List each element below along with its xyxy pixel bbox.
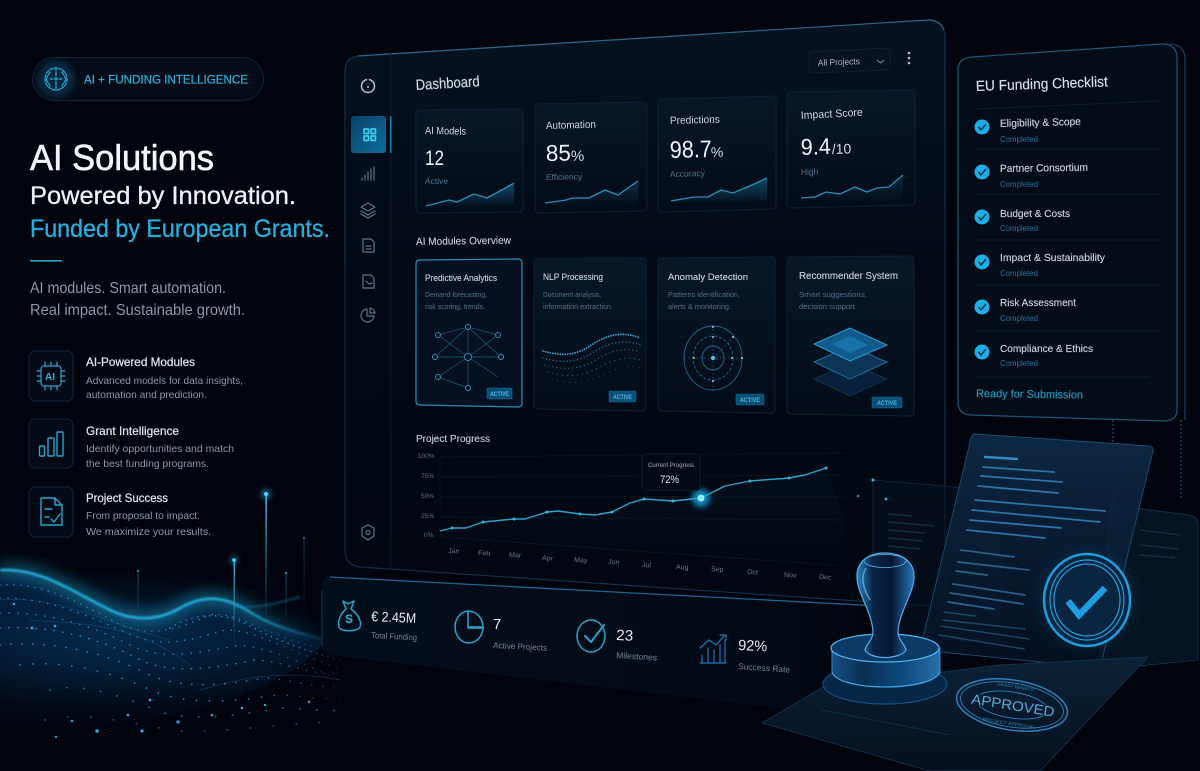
highlighted point xyxy=(692,489,710,507)
heading: Powered by Innovation. xyxy=(30,182,296,210)
y axis labels xyxy=(418,453,435,539)
module: Recommender System: decision support. xyxy=(799,302,857,311)
approved seal imprint xyxy=(953,672,1071,738)
x axis labels: Dec xyxy=(819,574,832,582)
module: Recommender System: Recommender System xyxy=(799,271,898,282)
card: Impact Score: Impact Score xyxy=(801,107,863,122)
module: Predictive Analytics: risk scoring, trends. xyxy=(425,302,485,311)
item: eligibility: Completed xyxy=(1000,135,1038,144)
stat: milestones: Milestones xyxy=(616,650,657,662)
heading: Funded by European Grants. xyxy=(30,215,330,243)
module: NLP Processing: information extraction. xyxy=(543,302,613,311)
feature: Grant Intelligence xyxy=(29,419,234,470)
heading: AI Modules Overview: AI Modules Overview xyxy=(416,235,511,248)
module: NLP Processing xyxy=(534,258,646,411)
x axis labels: Jul xyxy=(642,562,652,569)
icon: dashboard active xyxy=(351,116,392,153)
item: compliance: Completed xyxy=(1000,359,1038,368)
feature: AI-Powered Modules xyxy=(29,351,243,401)
callout: current progress: 72% xyxy=(660,474,679,486)
module: Predictive Analytics: Predictive Analytics xyxy=(425,273,497,284)
heading: Project Progress: Project Progress xyxy=(416,433,490,445)
stat: milestones xyxy=(577,620,657,662)
icon: AI chip xyxy=(37,362,65,390)
icon: growth chart xyxy=(700,635,726,663)
item: impact xyxy=(974,252,1106,278)
badge: AI + Funding Intelligence: AI + FUNDING INTELLIGENCE xyxy=(84,72,248,86)
item: risk: Risk Assessment xyxy=(1000,297,1076,309)
x axis labels: Oct xyxy=(747,569,758,577)
x axis labels xyxy=(448,548,832,582)
item: consortium: Partner Consortium xyxy=(1000,162,1088,175)
panel: funding statistics xyxy=(322,577,880,720)
y axis labels: 50% xyxy=(421,493,434,500)
card: Automation: 85 xyxy=(546,140,571,166)
subtitle: Real impact. Sustainable growth. xyxy=(30,302,245,319)
item: consortium xyxy=(974,162,1088,189)
item: risk: Completed xyxy=(1000,314,1038,323)
vertical light beams xyxy=(137,489,305,645)
project filter xyxy=(809,48,890,73)
card: Predictions: Accuracy xyxy=(670,168,706,179)
radar xyxy=(684,325,743,391)
card: Automation xyxy=(535,102,647,213)
panel: EU funding checklist xyxy=(958,44,1185,421)
module: Anomaly Detection: alerts & monitoring. xyxy=(668,302,731,311)
x axis labels: Mar xyxy=(509,552,522,560)
card: AI Models: Active xyxy=(425,176,448,186)
x axis labels: Aug xyxy=(676,564,689,572)
feature: AI-Powered Modules: automation and prediction. xyxy=(86,389,207,401)
item: consortium: Completed xyxy=(1000,180,1038,189)
icon: bars xyxy=(362,167,374,180)
module: Predictive Analytics xyxy=(416,259,522,407)
card: AI Models: AI Models xyxy=(425,125,466,138)
icon: circuit brain xyxy=(45,68,67,90)
feature: Project Success: Project Success xyxy=(86,491,168,505)
approved seal imprint: APPROVED xyxy=(970,691,1056,720)
card: Predictions xyxy=(658,96,776,212)
x axis labels: Nov xyxy=(784,572,797,580)
x axis labels: Jun xyxy=(608,559,620,567)
panel: EU funding checklist: EU Funding Checklist xyxy=(976,74,1108,95)
feature: Grant Intelligence: Grant Intelligence xyxy=(86,424,179,438)
subtitle: AI modules. Smart automation. xyxy=(30,280,226,297)
card: Impact Score: High xyxy=(801,166,819,177)
panel: dashboard xyxy=(345,20,945,606)
feature: Project Success: From proposal to impact. xyxy=(86,510,200,522)
stat: active projects: Active Projects xyxy=(493,640,547,653)
dotted wave xyxy=(543,334,640,383)
item: impact: Impact & Sustainability xyxy=(1000,252,1106,264)
icon: check circle xyxy=(577,620,605,652)
stat: total funding: Total Funding xyxy=(371,630,418,642)
card: Predictions: % xyxy=(711,144,724,160)
module: Predictive Analytics: Demand forecasting, xyxy=(425,290,487,299)
stat: active projects xyxy=(455,611,547,653)
card: Automation: % xyxy=(571,148,584,165)
approval sheet xyxy=(762,657,1148,771)
dashboard title: Dashboard xyxy=(415,73,480,94)
stat: total funding: € 2.45M xyxy=(371,608,417,626)
callout: current progress: Current Progress xyxy=(648,462,695,469)
stat: milestones: 23 xyxy=(616,627,634,645)
module: Recommender System: ACTIVE xyxy=(877,400,898,407)
stat: active projects: 7 xyxy=(493,616,501,633)
heading: AI Solutions xyxy=(30,137,214,178)
module: Recommender System xyxy=(787,256,914,416)
line chart: project progress xyxy=(418,453,845,582)
stamp xyxy=(823,553,947,704)
document with lines xyxy=(920,434,1153,668)
item: risk xyxy=(974,297,1076,323)
icon: layers xyxy=(361,203,375,218)
y axis labels: 75% xyxy=(421,473,434,480)
icon: money bag xyxy=(338,601,361,631)
feature: AI-Powered Modules: AI-Powered Modules xyxy=(86,355,195,369)
approved seal imprint: PROJECT APPROVAL xyxy=(982,717,1037,730)
item: compliance: Compliance & Ethics xyxy=(1000,343,1093,355)
back document panels xyxy=(857,420,1198,670)
item: budget: Budget & Costs xyxy=(1000,208,1070,220)
item: budget xyxy=(974,208,1070,233)
y axis labels: 0% xyxy=(424,532,434,539)
item: impact: Completed xyxy=(1000,269,1038,278)
stat: total funding xyxy=(338,601,418,642)
stat: success rate xyxy=(700,635,791,675)
callout: current progress xyxy=(642,454,700,490)
heading xyxy=(30,137,330,243)
x axis labels: Feb xyxy=(478,550,490,558)
card: AI Models xyxy=(416,109,523,213)
approved seal imprint: GRANT BENEFIT xyxy=(997,681,1035,692)
stat: total funding: S xyxy=(345,612,353,626)
module: NLP Processing: ACTIVE xyxy=(613,394,633,401)
item: budget: Completed xyxy=(1000,224,1038,233)
item: eligibility: Eligibility & Scope xyxy=(1000,116,1081,130)
x axis labels: Jan xyxy=(448,548,460,556)
layers graphic xyxy=(814,328,887,396)
feature: Project Success: We maximize your results. xyxy=(86,526,211,538)
module: NLP Processing: Document analysis, xyxy=(543,290,601,299)
card: Impact Score: 9.4 xyxy=(800,133,831,160)
card: Automation: Automation xyxy=(546,119,596,132)
feature: Grant Intelligence: Identify opportunities and match xyxy=(86,443,234,455)
card: Automation: Efficiency xyxy=(546,171,583,182)
feature: AI-Powered Modules: Advanced models for data insights, xyxy=(86,375,243,387)
icon: gear xyxy=(362,525,374,540)
icon: document check xyxy=(41,498,62,525)
module: Anomaly Detection: Patterns identification, xyxy=(668,290,740,299)
y axis labels: 25% xyxy=(421,513,434,520)
badge: AI + Funding Intelligence xyxy=(32,58,264,100)
icon: pie xyxy=(361,308,375,322)
icon: approval check seal xyxy=(1039,551,1135,647)
sidebar icons xyxy=(351,79,392,540)
x axis labels: May xyxy=(574,557,588,565)
icon: document chart xyxy=(363,275,374,288)
icon: document xyxy=(363,239,374,252)
module: Recommender System: Smart suggestions, xyxy=(799,290,867,299)
subtitle xyxy=(30,280,245,319)
feature: Grant Intelligence: the best funding programs. xyxy=(86,458,209,470)
module: Anomaly Detection xyxy=(658,257,775,413)
card: Impact Score xyxy=(787,90,915,208)
x axis labels: Apr xyxy=(542,555,554,563)
ready for submission: Ready for Submission xyxy=(976,388,1083,401)
accent divider xyxy=(30,260,62,262)
feature: Project Success xyxy=(29,487,211,538)
network graph xyxy=(432,324,504,390)
x axis labels: Sep xyxy=(711,566,724,574)
icon: bar chart xyxy=(40,432,63,456)
menu dots xyxy=(908,52,910,64)
card: Impact Score: /10 xyxy=(832,140,852,157)
module: Predictive Analytics: ACTIVE xyxy=(490,391,510,398)
module: Anomaly Detection: ACTIVE xyxy=(740,397,761,404)
stat: success rate: 92% xyxy=(738,637,768,655)
card: Predictions: Predictions xyxy=(670,114,720,127)
module: Anomaly Detection: Anomaly Detection xyxy=(668,272,748,283)
card: AI Models: 12 xyxy=(425,147,444,170)
wave data visualisation xyxy=(0,570,340,738)
stat: success rate: Success Rate xyxy=(738,661,791,675)
y axis labels: 100% xyxy=(418,453,435,460)
item: compliance xyxy=(974,343,1093,368)
feature: AI-Powered Modules: AI xyxy=(45,372,55,383)
item: eligibility xyxy=(974,116,1081,144)
icon: pie chart xyxy=(455,611,483,643)
module: NLP Processing: NLP Processing xyxy=(543,272,603,283)
icon: logo xyxy=(362,79,374,92)
card: Predictions: 98.7 xyxy=(669,136,712,164)
project filter: All Projects xyxy=(818,56,861,68)
